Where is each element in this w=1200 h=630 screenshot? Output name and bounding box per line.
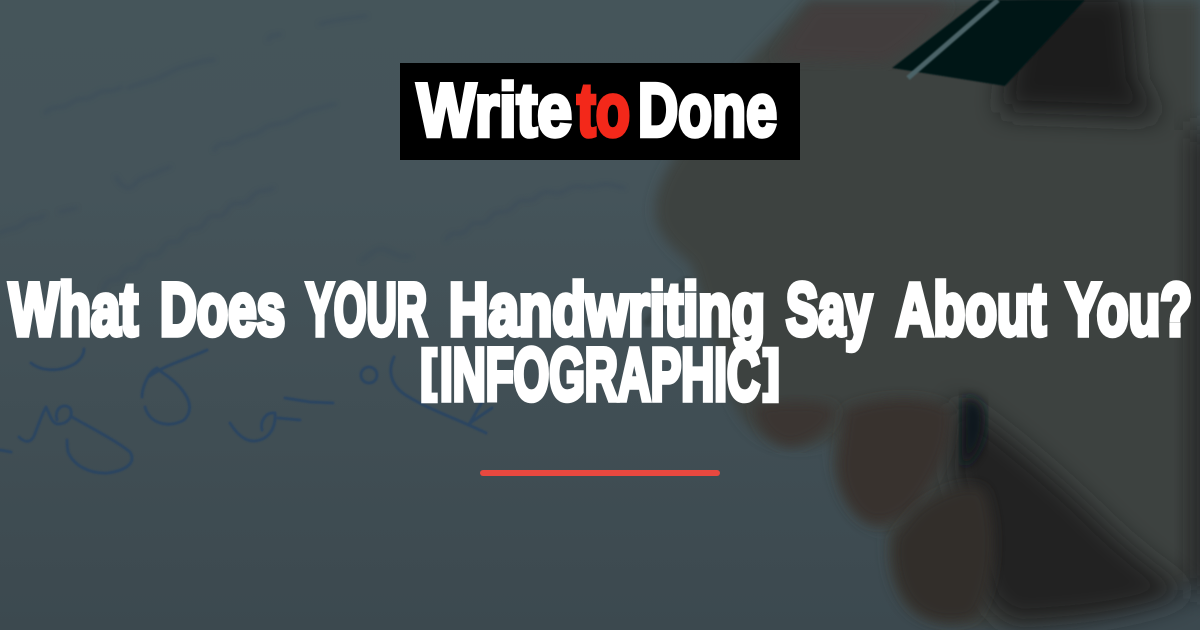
logo word: Done: Done [638,68,777,152]
logo word: Write: Write [417,68,572,152]
logo: WritetoDone [400,63,800,160]
pen barrel [892,0,1085,86]
gap shadow [962,398,985,468]
title line 1: About [896,268,1046,351]
title line 1: YOUR [306,268,427,351]
title line 1: Say [786,268,872,351]
hand silhouette [655,0,1200,626]
shadowed band between fingers [950,400,1190,624]
first finger tip [755,402,835,446]
title line 1 [9,268,1192,351]
dark area beyond pen [1000,0,1160,118]
background: hand holding pen [645,0,1200,626]
title line 2: ] [764,339,779,401]
title line 1: What [9,268,138,351]
background: faint handwriting [0,16,624,290]
second finger [838,399,951,523]
pen highlight [908,0,998,78]
background: handwriting strokes [0,349,492,473]
red divider line [480,470,720,476]
third finger [893,486,994,622]
right edge shade [1190,130,1200,590]
logo word: to: to [577,68,630,152]
brown top edge of hand [775,4,950,62]
title line 2: INFOGRAPHIC [440,333,760,416]
title line 1: Does [160,268,285,351]
title line 2: [ [421,339,436,401]
title line 1: Handwriting [449,268,765,351]
pen tip shadow [645,278,690,325]
title line 2 [421,333,779,416]
